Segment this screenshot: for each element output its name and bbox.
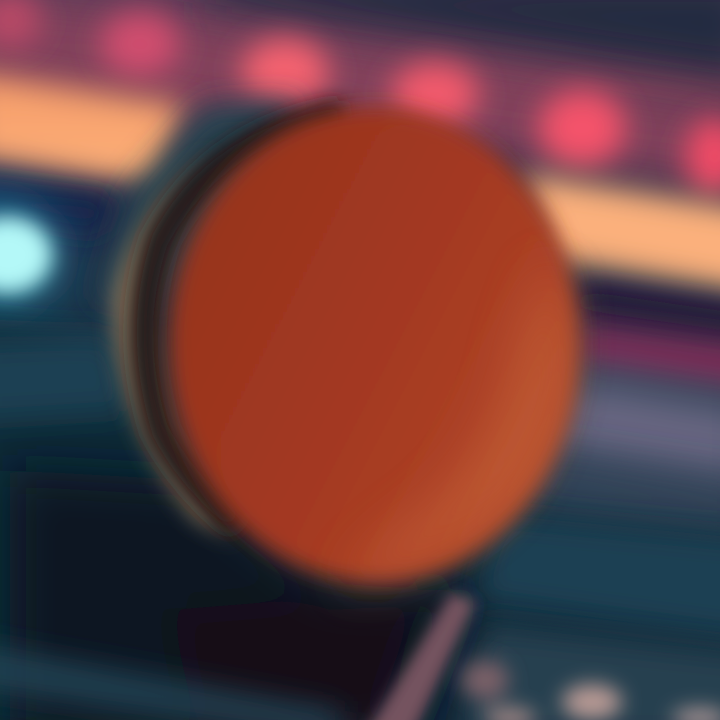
diagonal mic stand xyxy=(362,592,476,720)
grey lower right band xyxy=(540,372,720,490)
housing teal top left xyxy=(95,100,300,300)
small pale lights bottom xyxy=(461,660,720,720)
peach light strip right xyxy=(520,172,720,294)
cyan glow halo xyxy=(0,195,65,315)
bottom left pale stripe xyxy=(0,645,340,720)
sphere lower right highlight xyxy=(340,260,565,585)
dark navy band under left strip xyxy=(0,180,120,235)
sphere rim dark arc xyxy=(145,115,345,525)
orange sphere xyxy=(168,107,580,583)
pink band behind lights xyxy=(0,0,720,190)
housing tan edge xyxy=(112,150,235,540)
dark upper right haze xyxy=(200,0,720,85)
magenta band xyxy=(580,322,720,392)
lower right teal panel xyxy=(470,515,720,640)
cyan glow core xyxy=(0,217,52,293)
peach light strip left xyxy=(0,72,185,188)
dark shadow under sphere xyxy=(10,470,470,720)
lower right pale band xyxy=(460,625,720,720)
lower right grey fade band xyxy=(510,460,720,530)
dark maroon band under right strip xyxy=(580,288,720,338)
left dark teal area xyxy=(0,320,200,720)
pink bokeh lights xyxy=(0,0,720,194)
